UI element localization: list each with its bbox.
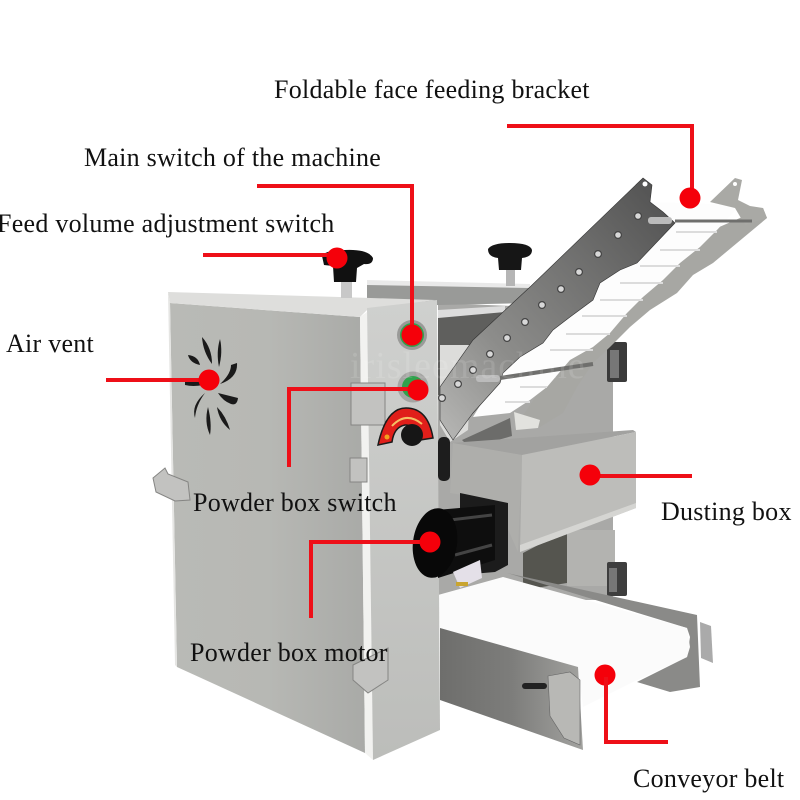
leader line — [592, 474, 692, 478]
label: Powder box switch — [193, 488, 397, 517]
icon: air vent cutouts — [185, 337, 238, 435]
label: Feed volume adjustment switch — [0, 209, 335, 238]
marker — [326, 248, 348, 268]
leader line — [257, 186, 412, 330]
foldable feeding bracket plate — [439, 178, 675, 440]
conveyor belt — [438, 573, 713, 750]
marker — [594, 664, 616, 686]
machine illustration — [153, 178, 767, 760]
label: Powder box motor — [190, 638, 388, 667]
leader line — [507, 126, 692, 195]
icon: front adjustment knob — [322, 250, 373, 298]
leader line — [289, 389, 415, 467]
annotation: main switch of the machine — [84, 143, 422, 346]
annotation: dusting box — [580, 464, 792, 526]
annotation: feed volume adjustment switch — [0, 209, 348, 268]
top right bracket end — [500, 178, 767, 378]
label: Main switch of the machine — [84, 143, 381, 172]
front control panel — [367, 300, 440, 760]
annotation: air vent — [6, 329, 220, 390]
hinges and latch — [153, 383, 388, 693]
left side panel — [168, 292, 435, 760]
leader line — [606, 677, 668, 742]
annotation: powder box motor — [190, 532, 440, 667]
annotation: conveyor belt — [594, 664, 785, 793]
marker — [402, 324, 422, 346]
marker — [198, 370, 220, 390]
icon: powder box switch — [398, 372, 428, 402]
label: Air vent — [6, 329, 95, 358]
bracket behind motor — [438, 437, 450, 481]
lower roller bracket — [462, 412, 540, 448]
rear housing — [367, 280, 627, 600]
label: Conveyor belt — [633, 764, 785, 793]
marker — [580, 464, 600, 486]
icon: rear adjustment knob — [488, 243, 532, 286]
marker — [408, 380, 428, 400]
dusting box — [450, 430, 636, 552]
leader line — [106, 378, 205, 382]
marker — [680, 188, 700, 208]
label: Foldable face feeding bracket — [274, 75, 590, 104]
annotation: powder box switch — [193, 380, 428, 517]
icon: main switch — [397, 320, 427, 350]
white roller tray — [473, 202, 740, 417]
leader line — [203, 253, 335, 257]
icon: powder box motor — [408, 493, 508, 588]
icon: speed dial — [378, 408, 433, 446]
annotation: foldable face feeding bracket — [274, 75, 700, 208]
marker — [420, 532, 440, 552]
watermark: irisleemachine — [350, 345, 586, 387]
label: Dusting box — [661, 497, 792, 526]
leader line — [311, 542, 428, 618]
rear wavy rail — [520, 208, 767, 427]
